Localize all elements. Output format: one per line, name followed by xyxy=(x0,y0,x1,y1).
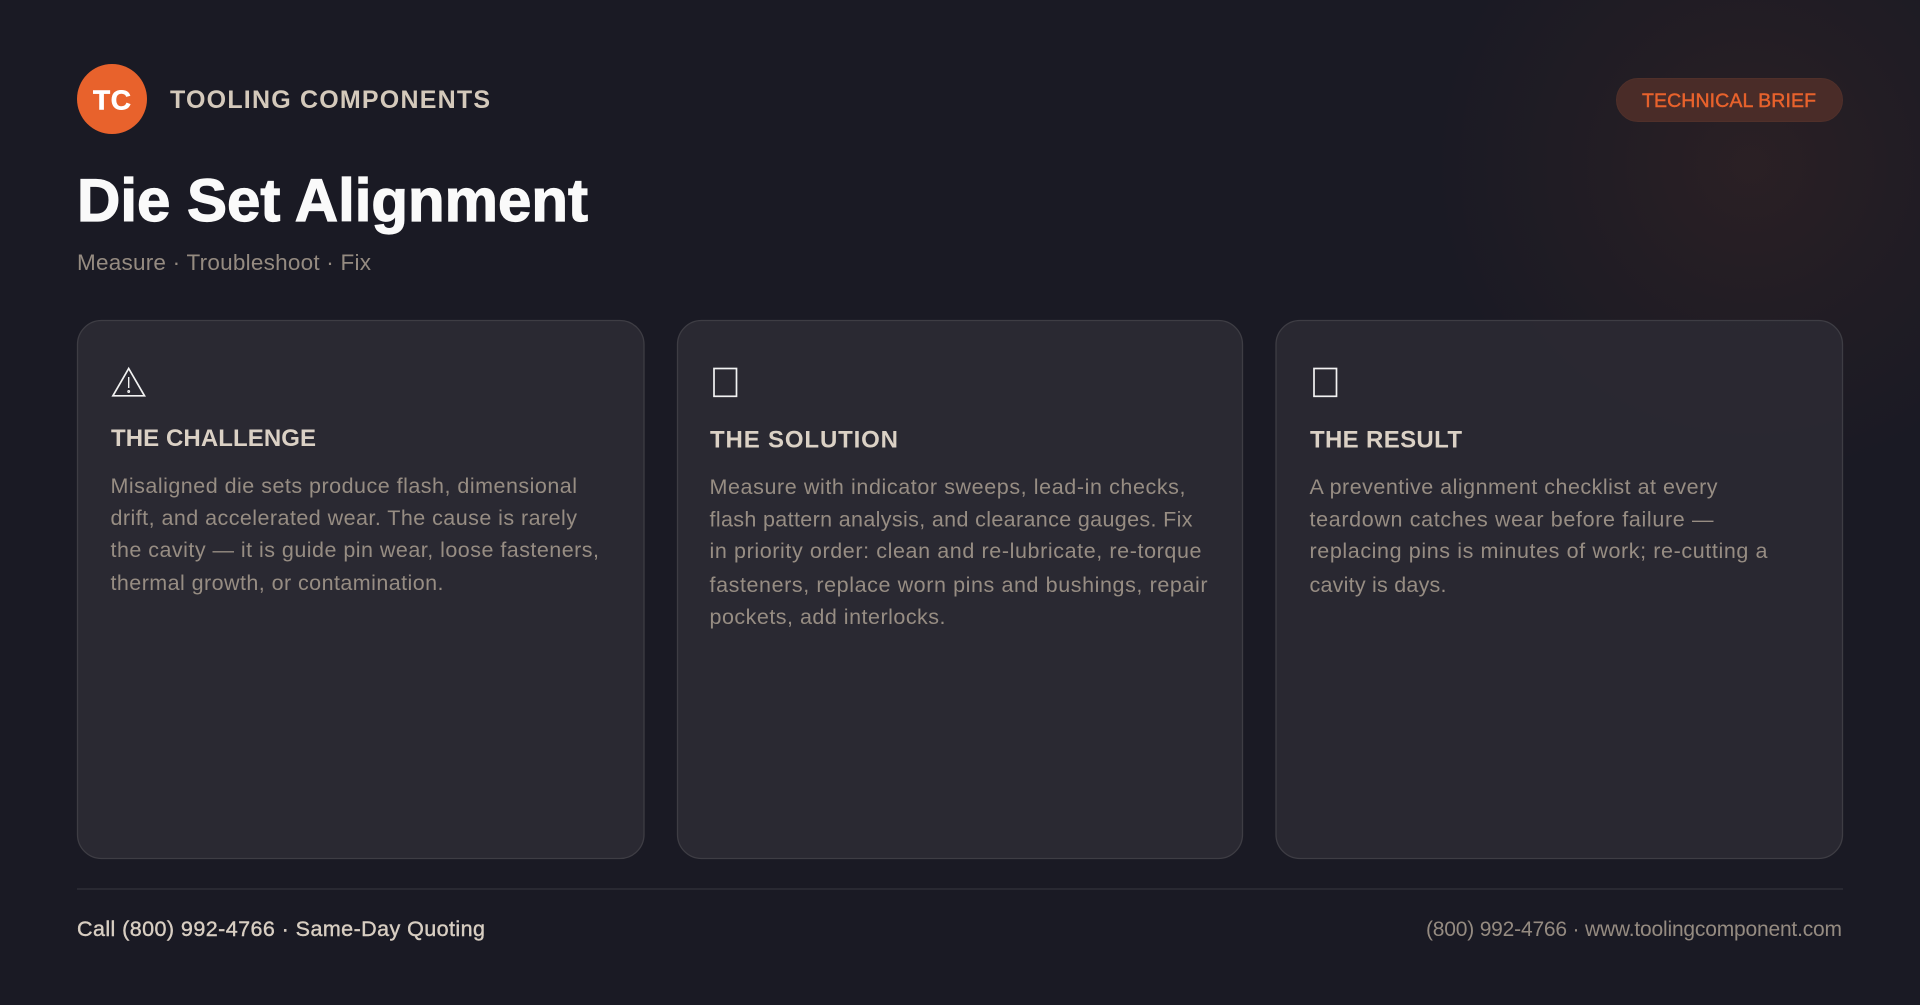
icon: missing glyph box xyxy=(1314,368,1336,396)
header: brand logo and name xyxy=(77,64,490,134)
subtitle: Measure · Troubleshoot · Fix xyxy=(77,250,372,275)
body text: the result: teardown catches wear before failure — xyxy=(1310,508,1714,532)
body text: the challenge: thermal growth, or contamination. xyxy=(110,571,444,595)
body text: the solution xyxy=(710,475,1208,629)
body text: the solution: in priority order: clean and re-lubricate, re-torque xyxy=(710,539,1202,563)
panel: the solution xyxy=(678,320,1242,858)
technical brief badge: TECHNICAL BRIEF xyxy=(1642,90,1816,112)
logo badge xyxy=(77,64,147,134)
body text: the solution: pockets, add interlocks. xyxy=(710,605,946,629)
heading: the result: THE RESULT xyxy=(1310,426,1462,454)
body text: the result: cavity is days. xyxy=(1310,573,1446,597)
panel: the challenge xyxy=(78,320,644,858)
body text: the challenge: the cavity — it is guide pin wear, loose fasteners, xyxy=(110,538,599,562)
body text: the result xyxy=(1310,475,1768,597)
icon: warning triangle xyxy=(113,368,144,396)
footer: call to action: Call (800) 992-4766 · Same-Day Quoting xyxy=(77,917,485,941)
panel: the result xyxy=(1276,320,1842,858)
body text: the challenge: Misaligned die sets produce flash, dimensional xyxy=(110,474,577,498)
body text: the challenge xyxy=(110,474,599,595)
heading: the challenge: THE CHALLENGE xyxy=(111,425,316,452)
technical brief badge xyxy=(1616,78,1842,122)
heading: the solution: THE SOLUTION xyxy=(710,426,898,454)
body text: the result: replacing pins is minutes of work; re-cutting a xyxy=(1310,539,1768,563)
footer: contact details: (800) 992-4766 · www.toolingcomponent.com xyxy=(1426,918,1842,941)
body text: the solution: fasteners, replace worn pins and bushings, repair xyxy=(710,573,1208,597)
body text: the solution: flash pattern analysis, and clearance gauges. Fix xyxy=(710,508,1193,532)
brand name: TOOLING COMPONENTS xyxy=(170,86,490,114)
logo badge: TC xyxy=(93,84,131,116)
body text: the result: A preventive alignment checklist at every xyxy=(1310,475,1718,499)
title: Die Set Alignment xyxy=(77,167,588,234)
icon: missing glyph box xyxy=(714,368,736,396)
body text: the solution: Measure with indicator sweeps, lead-in checks, xyxy=(710,475,1186,499)
body text: the challenge: drift, and accelerated wear. The cause is rarely xyxy=(110,506,577,530)
